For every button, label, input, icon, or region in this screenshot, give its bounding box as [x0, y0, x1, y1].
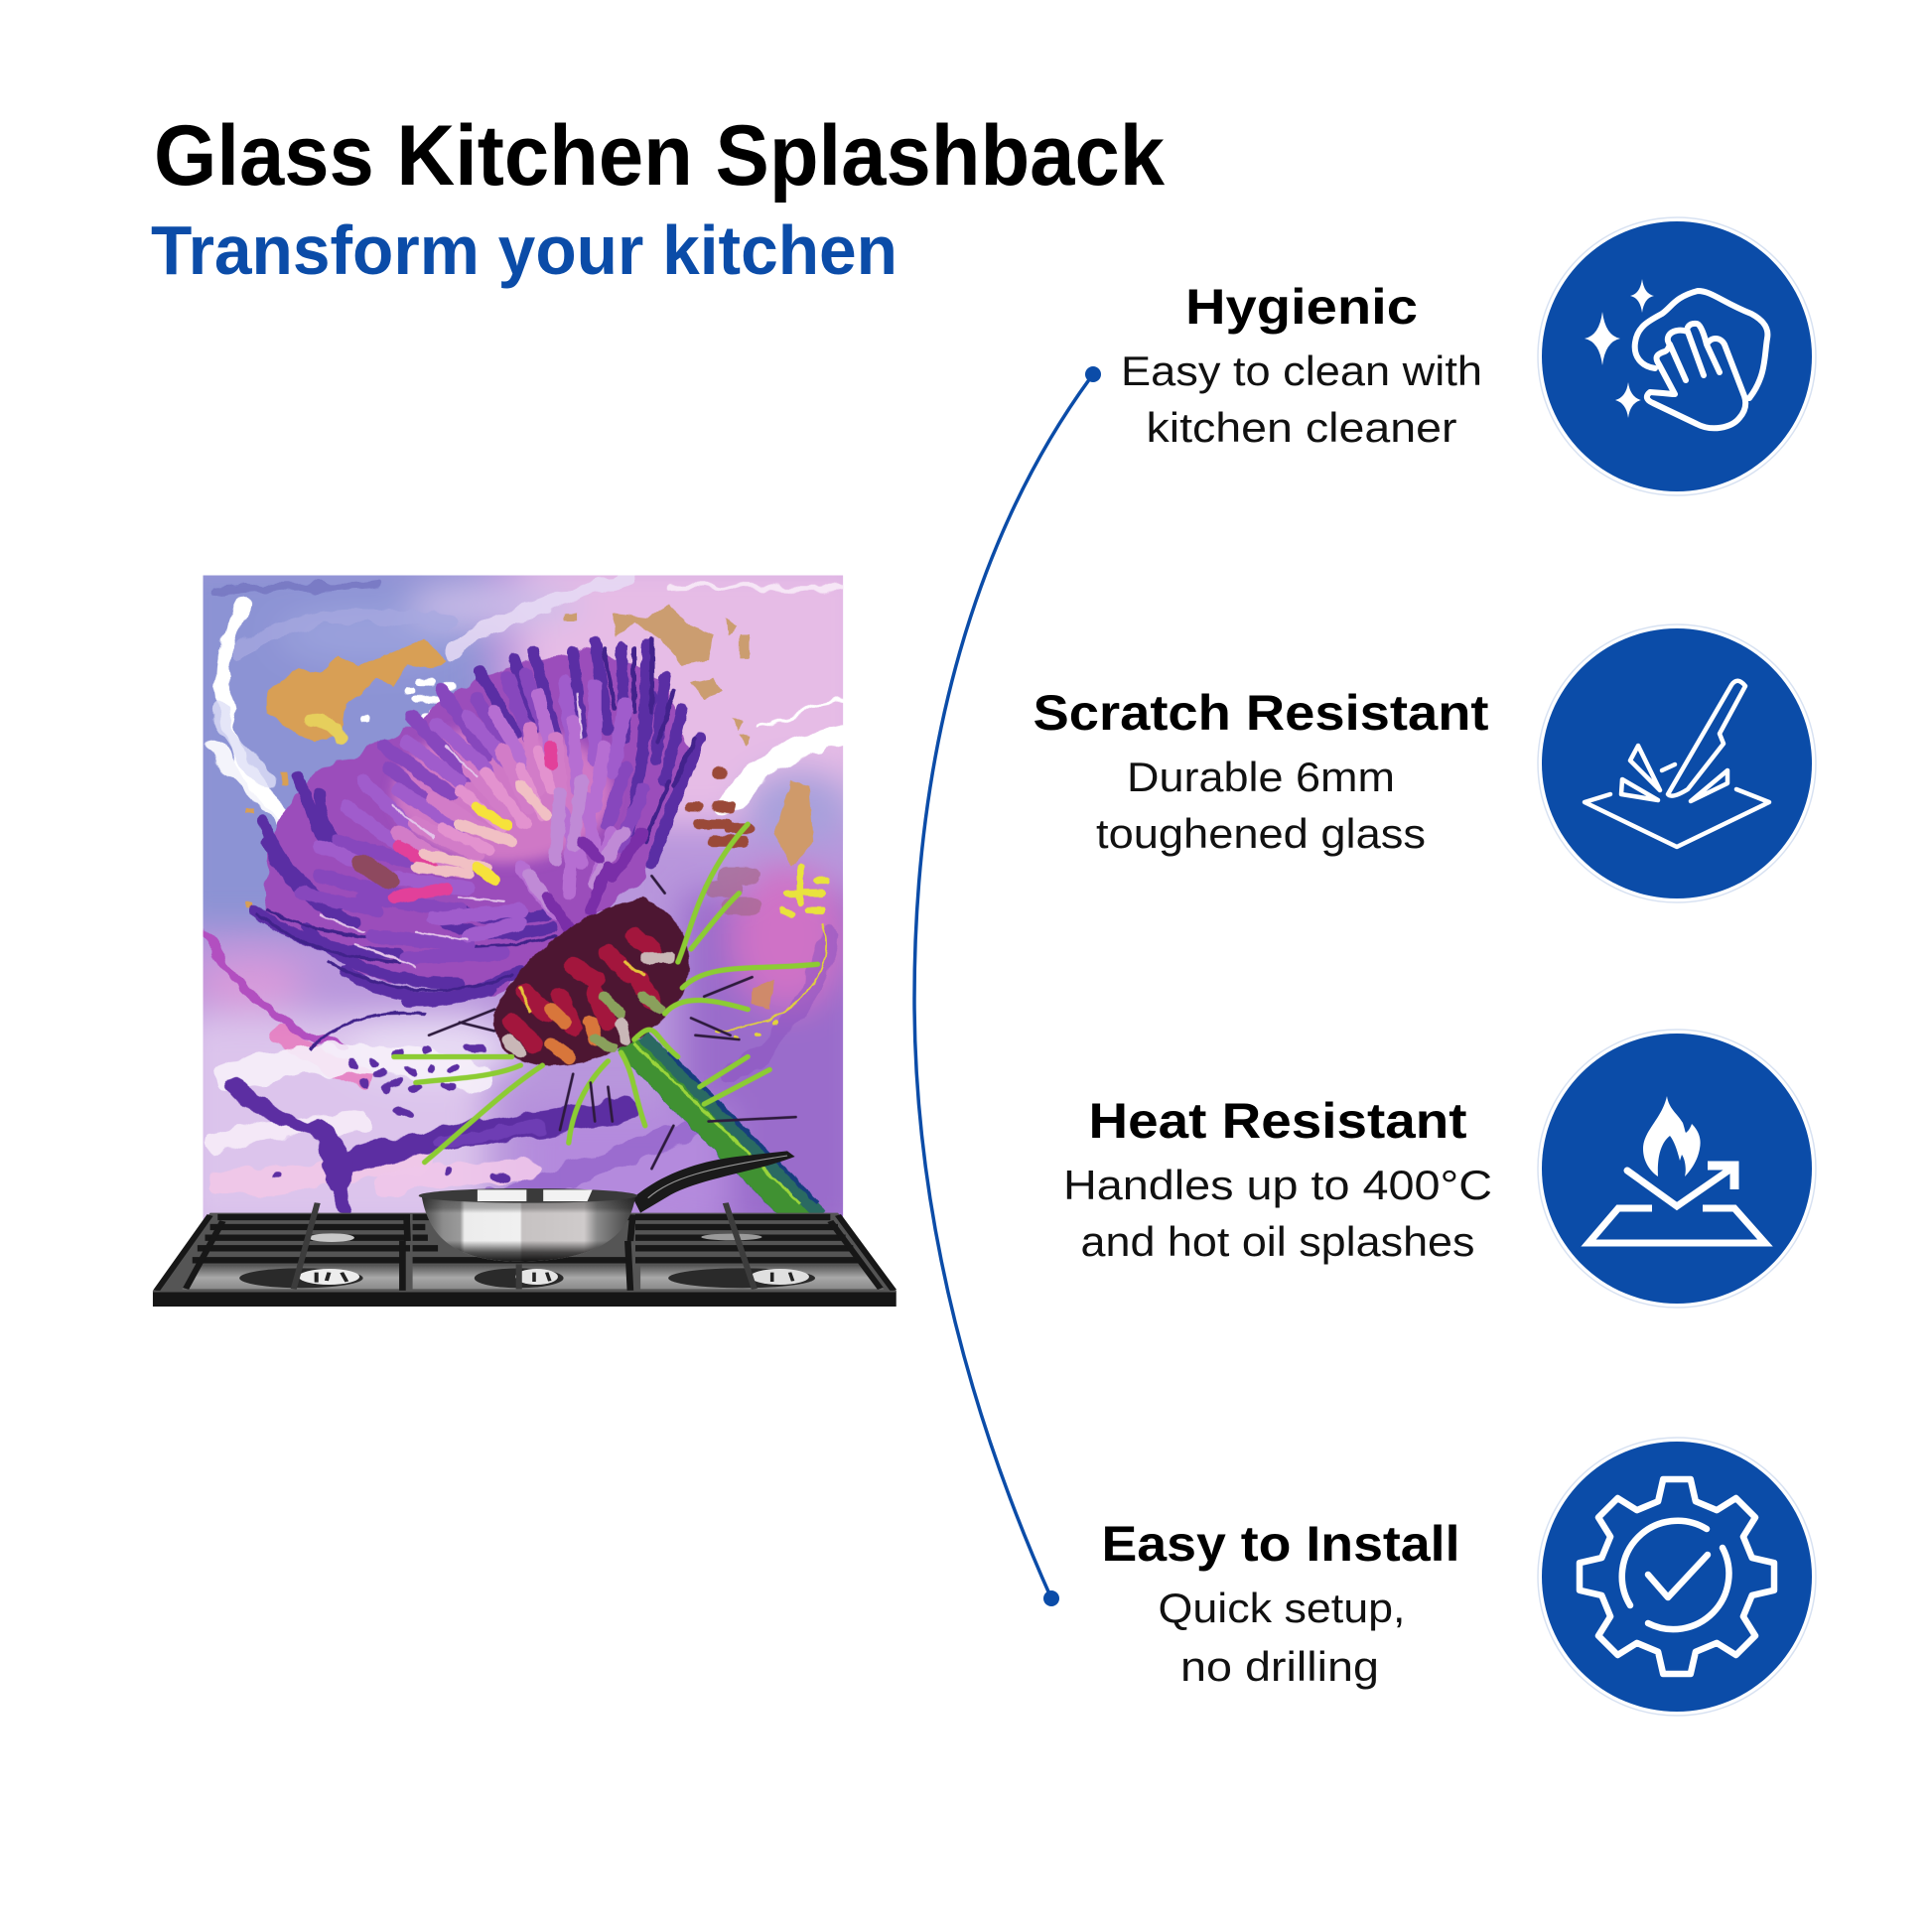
icon: hand wiping with sparkles: [1538, 217, 1816, 495]
feature text: hygienic: Hygienic: [1185, 279, 1418, 335]
yellow and rust flecks: [311, 682, 826, 1037]
thistle stem: [625, 1043, 818, 1225]
feature text: heat resistant: Handles up to 400°C: [1063, 1162, 1492, 1208]
pink inner petals: [398, 730, 560, 872]
green thistle spines: [394, 824, 818, 1169]
background colour washes: [203, 576, 844, 1219]
feature text: heat resistant: and hot oil splashes: [1080, 1218, 1475, 1265]
feature text: easy to install: Quick setup,: [1158, 1585, 1406, 1631]
gold leaf splatter: [245, 605, 813, 1010]
feature text: hygienic: kitchen cleaner: [1146, 404, 1457, 451]
connector curve: [914, 366, 1101, 1598]
connector dot top: [1085, 366, 1101, 382]
feature text: scratch resistant: Durable 6mm: [1127, 754, 1395, 800]
frying pan: [419, 1151, 795, 1262]
feature text: heat resistant: Heat Resistant: [1088, 1093, 1467, 1149]
feature text: easy to install: no drilling: [1180, 1643, 1379, 1690]
dark outer fans: [480, 641, 700, 863]
feature text: scratch resistant: toughened glass: [1096, 810, 1426, 857]
icon: knife scratching glass: [1538, 624, 1816, 902]
pan bowl: [422, 1196, 635, 1262]
connector dot bottom: [1043, 1590, 1059, 1606]
hob body: [153, 1213, 897, 1307]
feature text: easy to install: [1102, 1516, 1459, 1690]
feature text: easy to install: Easy to Install: [1102, 1516, 1459, 1572]
sparkles: [1585, 279, 1654, 418]
flower petals mass: [263, 647, 691, 997]
subtitle: Transform your kitchen: [151, 211, 897, 289]
mid purple petals: [302, 673, 643, 958]
feature text: hygienic: [1121, 279, 1482, 451]
splashback painting: thistle: [203, 576, 844, 1220]
icon: gear with check mark: [1538, 1438, 1816, 1716]
feature text: heat resistant: [1063, 1093, 1492, 1265]
thistle bulb scales: [493, 897, 689, 1066]
icon: flame over heat-deflecting surface: [1538, 1030, 1816, 1308]
burners: [239, 1233, 815, 1288]
pot supports: [294, 1203, 755, 1289]
brush swirls and white swooshes: [207, 579, 843, 1199]
pan handle: [632, 1151, 795, 1213]
feature text: scratch resistant: [1033, 685, 1489, 857]
steel trays: [183, 1266, 400, 1289]
front edge: [153, 1291, 897, 1307]
title: Glass Kitchen Splashback: [154, 108, 1165, 204]
feature text: hygienic: Easy to clean with: [1121, 347, 1482, 394]
gas hob: [153, 1203, 897, 1307]
grate bars: [157, 1214, 894, 1291]
dark purple paint sweep: [232, 1048, 625, 1207]
pan rim: [419, 1188, 637, 1203]
feature text: scratch resistant: Scratch Resistant: [1033, 685, 1489, 741]
